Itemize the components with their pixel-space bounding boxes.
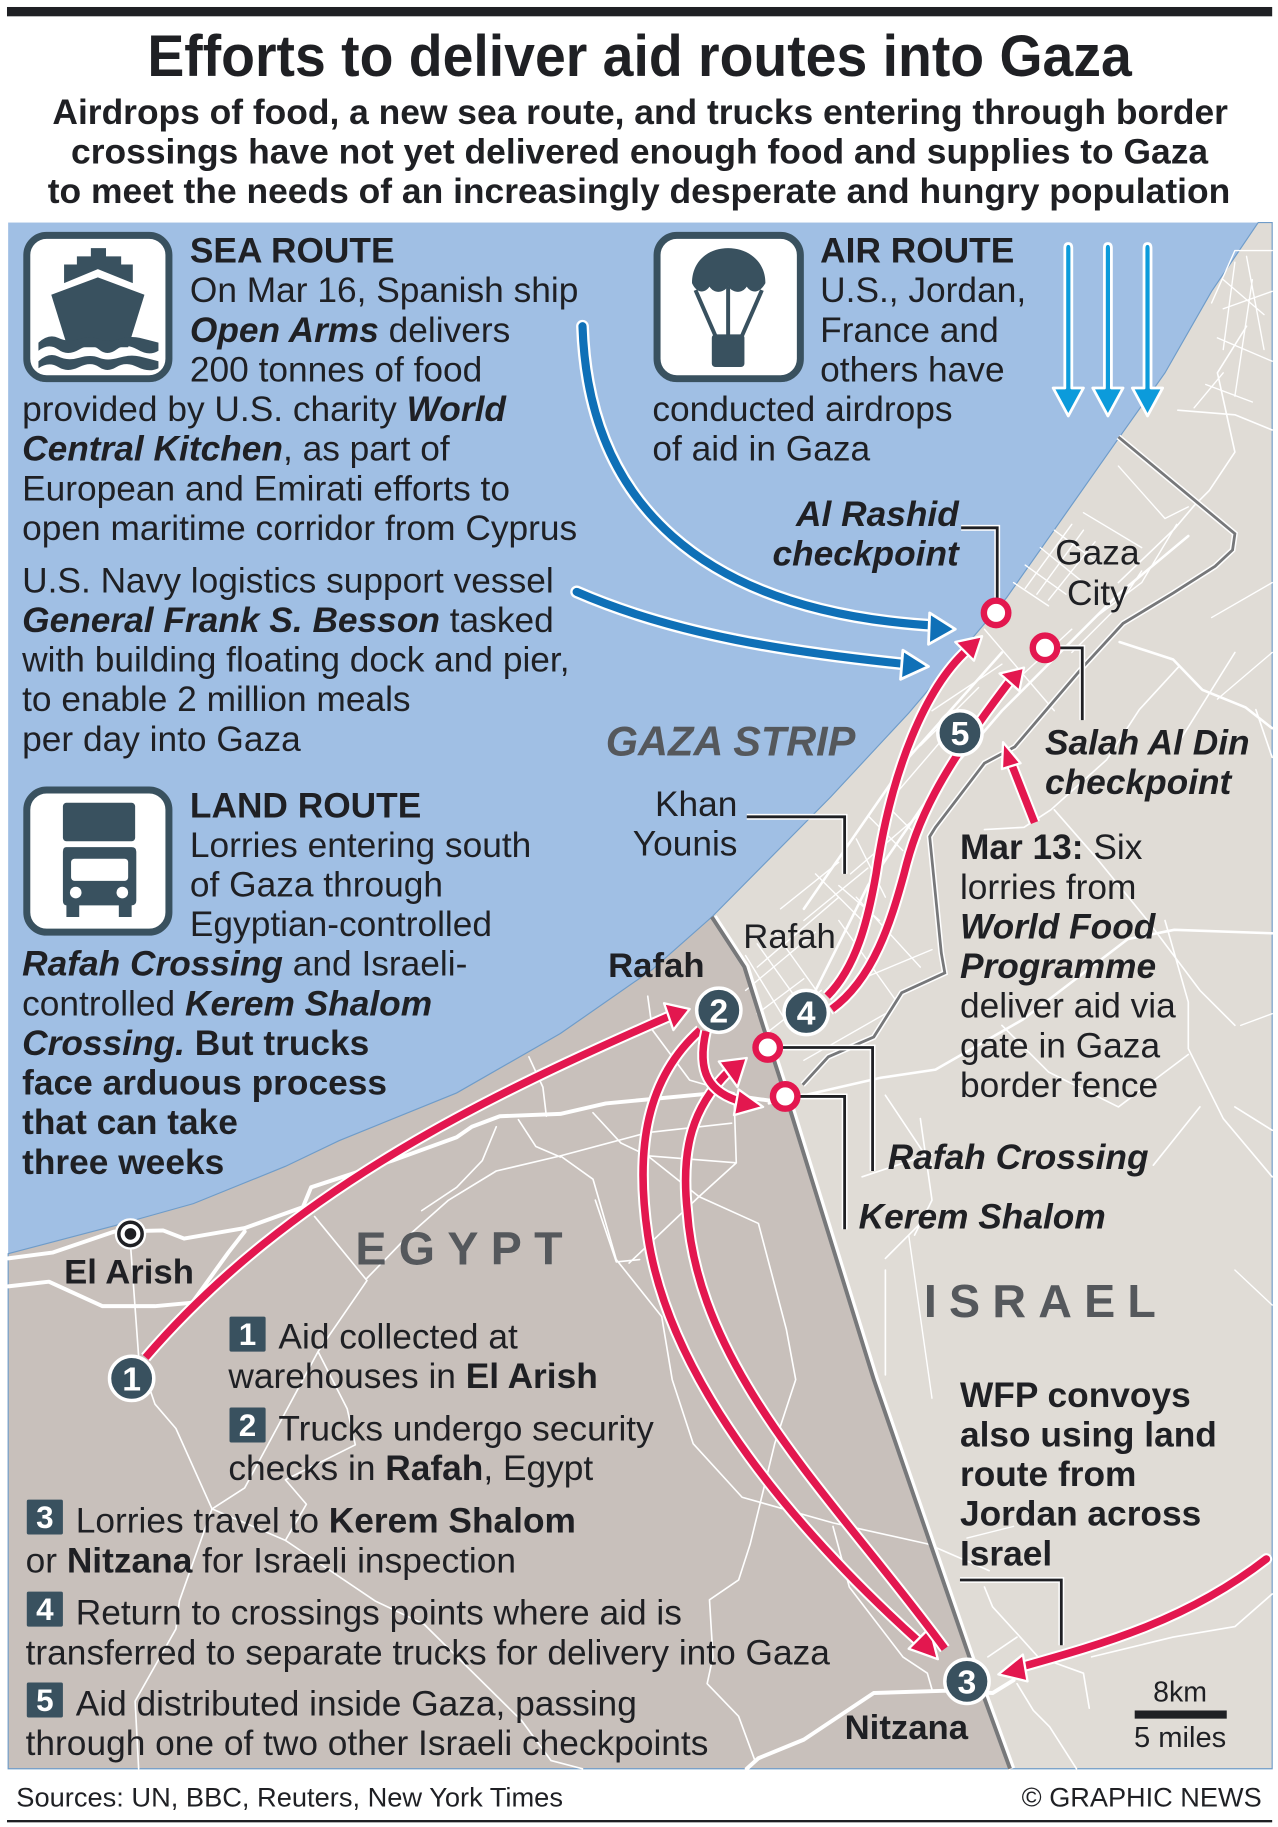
arrow: Jordan land route [998, 1559, 1266, 1681]
icon: parachute [657, 235, 800, 379]
arrow: Rafah to Kerem Shalom [703, 1031, 763, 1115]
text: airdrops: of aid in Gaza [652, 430, 871, 469]
step 3: or Nitzana for Israeli inspection [26, 1541, 516, 1580]
bottom rule [7, 1820, 1272, 1822]
text: lorries: Lorries entering south [190, 826, 531, 865]
label: Salah Al Din checkpoint: checkpoint [1045, 763, 1233, 802]
text: lorries: three weeks [22, 1143, 224, 1182]
callout: World Food Programme: lorries from [960, 868, 1136, 907]
text: airdrops [652, 271, 1026, 469]
callout: WFP convoys [960, 1376, 1217, 1573]
subtitle: crossings have not yet delivered enough food and supplies to Gaza [71, 132, 1208, 172]
text: airdrops: conducted airdrops [652, 390, 953, 429]
text: airdrops: France and [820, 311, 999, 350]
text: lorries: of Gaza through [190, 865, 443, 904]
text: General Frank S. Besson: per day into Gaza [22, 720, 301, 759]
step 3 [26, 1500, 576, 1580]
leader: Khan Younis [747, 817, 845, 874]
step 1 [227, 1317, 598, 1396]
text: Open Arms [22, 271, 578, 548]
label: Salah Al Din checkpoint [1045, 723, 1250, 802]
text: Open Arms: European and Emirati efforts to [22, 469, 510, 508]
callout: World Food Programme: border fence [960, 1066, 1158, 1105]
step 1: 1 [239, 1317, 256, 1352]
text: Open Arms: open maritime corridor from Cyprus [22, 509, 577, 548]
label: Khan Younis: Younis [633, 825, 737, 864]
checkpoint: Kerem Shalom [773, 1084, 797, 1109]
label: Al Rashid checkpoint [772, 495, 960, 574]
subtitle: Airdrops of food, a new sea route, and trucks entering through border [52, 92, 1228, 132]
step 2: Trucks undergo security [278, 1410, 654, 1449]
step 5: through one of two other Israeli checkpoints [26, 1724, 708, 1763]
icon: truck [27, 790, 169, 932]
callout: World Food Programme: gate in Gaza [960, 1026, 1160, 1065]
callout: World Food Programme: Mar 13: Six [960, 828, 1143, 867]
sources: Sources: UN, BBC, Reuters, New York Times [16, 1781, 563, 1812]
step 5 [26, 1683, 708, 1763]
text: General Frank S. Besson [21, 561, 570, 759]
scale bar [1134, 1677, 1227, 1754]
subtitle [48, 92, 1230, 211]
subtitle: to meet the needs of an increasingly desperate and hungry population [48, 171, 1230, 211]
scale bar: 8km [1153, 1677, 1207, 1709]
icon: ship [27, 235, 169, 379]
step 3: 3 [36, 1500, 54, 1535]
arrow: sea route to pier [577, 592, 929, 679]
marker 2: 2 [709, 992, 728, 1030]
text: lorries: Egyptian-controlled [190, 905, 492, 944]
step 4 [26, 1592, 830, 1672]
checkpoint: Al Rashid [984, 601, 1008, 625]
callout: WFP convoys: also using land [960, 1415, 1217, 1454]
marker 1: 1 [122, 1361, 141, 1399]
checkpoint: Salah Al Din [1033, 636, 1057, 660]
label: Israel: ISRAEL [924, 1275, 1168, 1327]
heading: air route: AIR ROUTE [820, 232, 1014, 271]
callout: World Food Programme: deliver aid via [960, 987, 1176, 1026]
label: Rafah Crossing: Rafah Crossing [888, 1138, 1149, 1177]
text: General Frank S. Besson: with building floating dock and pier, [21, 641, 570, 680]
callout: World Food Programme [960, 828, 1176, 1105]
text: Open Arms: Central Kitchen, as part of [22, 430, 450, 469]
title: Efforts to deliver aid routes into Gaza [147, 24, 1132, 89]
text: Open Arms: On Mar 16, Spanish ship [190, 271, 578, 310]
arrow: step 4 to Salah Al Din [832, 668, 1024, 1009]
text: airdrops: U.S., Jordan, [820, 271, 1026, 310]
label: Nitzana: Nitzana [845, 1709, 969, 1747]
border: Egypt and Gaza/Israel [712, 917, 1012, 1769]
arrows: air drops [1053, 244, 1163, 416]
credit: © GRAPHIC NEWS [1022, 1781, 1262, 1812]
text: lorries: Crossing. But trucks [22, 1024, 369, 1063]
border: Gaza Strip and Israel [803, 437, 1235, 1085]
heading: sea route: SEA ROUTE [190, 232, 395, 271]
marker 5 [938, 711, 982, 755]
marker 5: 5 [951, 715, 969, 753]
arrow: Rafah to Nitzana [643, 1030, 938, 1659]
scale bar: 5 miles [1134, 1722, 1226, 1754]
arrow: Mar 13 lorries [1002, 742, 1035, 823]
callout: WFP convoys: Israel [960, 1534, 1052, 1573]
label: Khan Younis [633, 785, 737, 864]
text: lorries: face arduous process [22, 1064, 387, 1103]
label: Khan Younis: Khan [655, 785, 737, 824]
land: Egypt [8, 917, 1010, 1769]
text: lorries: that can take [22, 1103, 238, 1142]
step 4: Return to crossings points where aid is [76, 1594, 682, 1633]
callout: WFP convoys: route from [960, 1455, 1136, 1494]
heading: land route: LAND ROUTE [190, 786, 421, 825]
marker 1 [110, 1356, 154, 1401]
text: lorries: controlled Kerem Shalom [22, 984, 432, 1023]
checkpoint: Rafah Crossing [755, 1035, 780, 1060]
marker 3 [945, 1659, 989, 1703]
label: Salah Al Din checkpoint: Salah Al Din [1045, 723, 1250, 762]
step 1: warehouses in El Arish [227, 1357, 598, 1396]
arrow: sea route to Al Rashid [582, 326, 955, 644]
land: Israel and Gaza Strip [712, 223, 1272, 1769]
label: Al Rashid checkpoint: checkpoint [772, 535, 960, 574]
step 4: transferred to separate trucks for delivery into Gaza [26, 1633, 830, 1672]
callout: WFP convoys: WFP convoys [960, 1376, 1191, 1415]
label: Rafah, Gaza: Rafah [743, 918, 836, 956]
arrow: step 4 to Al Rashid [827, 636, 982, 996]
label: El Arish: El Arish [64, 1253, 194, 1291]
label: Egypt: EGYPT [355, 1223, 575, 1275]
step 4: 4 [36, 1592, 54, 1627]
callout: World Food Programme: World Food [960, 907, 1157, 946]
callout: WFP convoys: Jordan across [960, 1495, 1201, 1534]
step 3: Lorries travel to Kerem Shalom [76, 1502, 576, 1541]
panel: land route [22, 786, 531, 1182]
label: Gaza Strip: GAZA STRIP [606, 717, 856, 765]
step 2: 2 [239, 1408, 256, 1443]
step 5: 5 [36, 1683, 54, 1718]
label: Gaza City: City [1067, 574, 1128, 613]
label: Al Rashid checkpoint: Al Rashid [795, 495, 960, 534]
marker 4 [784, 990, 828, 1035]
label: Kerem Shalom: Kerem Shalom [859, 1198, 1106, 1237]
marker 2 [697, 988, 741, 1032]
marker: El Arish [115, 1218, 146, 1250]
arrow: step 1 to step 2 [146, 1003, 690, 1357]
panel: sea route [21, 232, 578, 759]
marker 4: 4 [797, 995, 816, 1033]
step 1: Aid collected at [278, 1318, 518, 1357]
callout: World Food Programme: Programme [960, 947, 1156, 986]
label: Rafah, Egypt: Rafah [608, 947, 705, 985]
label: Gaza City [1055, 533, 1140, 613]
top rule [7, 7, 1272, 16]
text: Open Arms: provided by U.S. charity World [22, 390, 507, 429]
marker 3: 3 [958, 1663, 976, 1701]
step 5: Aid distributed inside Gaza, passing [76, 1685, 637, 1724]
text: lorries [22, 826, 531, 1182]
text: lorries: Rafah Crossing and Israeli- [22, 945, 467, 984]
text: General Frank S. Besson: General Frank S. Besson tasked [22, 601, 554, 640]
text: airdrops: others have [820, 350, 1005, 389]
panel: air route [652, 232, 1026, 469]
text: General Frank S. Besson: to enable 2 million meals [22, 680, 411, 719]
text: General Frank S. Besson: U.S. Navy logistics support vessel [22, 561, 554, 600]
label: Gaza City: Gaza [1055, 533, 1140, 572]
text: Open Arms: Open Arms delivers [190, 311, 510, 350]
leaders: checkpoints [781, 528, 1082, 1645]
step 2: checks in Rafah, Egypt [228, 1449, 593, 1488]
arrow: Nitzana to Rafah Crossing [686, 1058, 945, 1649]
text: Open Arms: 200 tonnes of food [190, 350, 482, 389]
step 2 [228, 1408, 654, 1488]
